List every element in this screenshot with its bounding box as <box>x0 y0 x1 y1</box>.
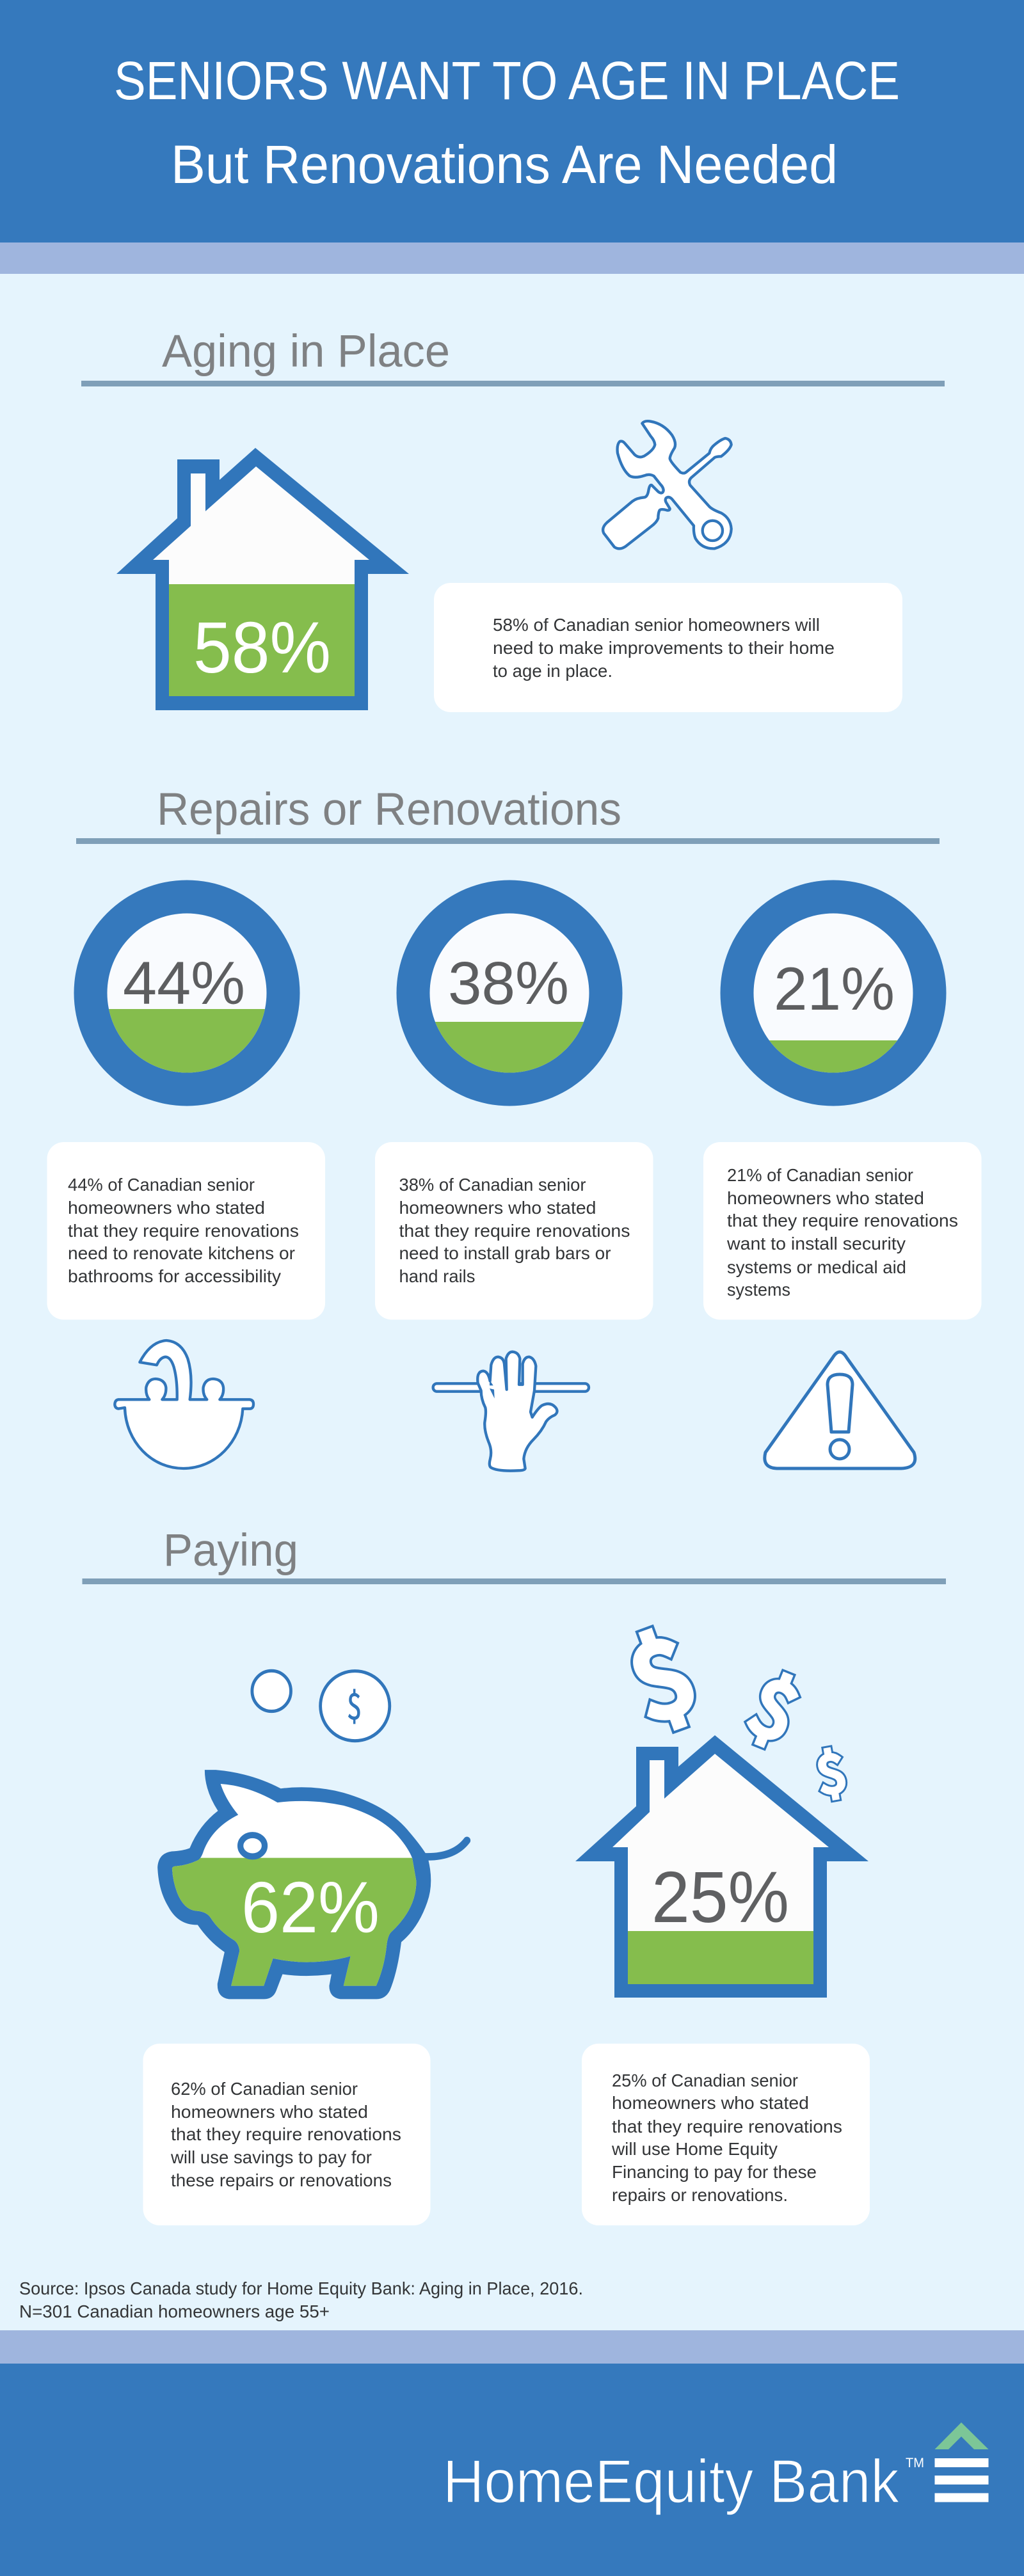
icon: coins: $ <box>347 1678 362 1730</box>
callout: 62% text: these repairs or renovations <box>171 2170 392 2190</box>
section heading: Paying: Paying <box>163 1525 298 1576</box>
subtitle: But Renovations Are Needed <box>171 134 838 195</box>
callout: 62% text: will use savings to pay for <box>170 2147 372 2167</box>
value: 25%: 25% <box>652 1857 789 1937</box>
value: 38%: 38% <box>448 950 569 1017</box>
icon: sink <box>115 1340 253 1468</box>
callout: 44% text: 44% of Canadian senior <box>68 1175 255 1195</box>
header banner <box>0 0 1024 274</box>
section heading: Aging in Place <box>81 326 945 386</box>
icon: dollar signs: $ <box>810 1731 851 1809</box>
icon: dollar signs: $ <box>736 1646 815 1763</box>
callout: 21% text: 21% of Canadian senior <box>727 1165 913 1185</box>
icon: coins <box>252 1671 390 1741</box>
callout: 62% text: 62% of Canadian senior <box>171 2079 358 2099</box>
callout: 25% text: repairs or renovations. <box>612 2185 788 2205</box>
icon: logo mark <box>934 2422 988 2502</box>
callout: 21% text: systems <box>727 1280 790 1300</box>
chart: circle 44% <box>74 880 300 1106</box>
logo: HomeEquity Bank: TM <box>906 2456 924 2470</box>
value: 62%: 62% <box>241 1867 380 1948</box>
icon: dollar signs: $ <box>609 1594 711 1751</box>
callout: 25% text: that they require renovations <box>612 2117 842 2136</box>
callout: 58% text: to age in place. <box>493 661 612 681</box>
callout: 21% text <box>703 1142 982 1319</box>
callout: 62% text: homeowners who stated <box>171 2102 368 2122</box>
chart: circle 21% <box>721 880 946 1106</box>
callout: 38% text: that they require renovations <box>399 1221 630 1241</box>
section heading: Repairs or Renovations: Repairs or Renovations <box>157 784 621 835</box>
callout: 62% text <box>143 2044 430 2225</box>
callout: 38% text: need to install grab bars or <box>399 1243 611 1263</box>
callout: 38% text: hand rails <box>399 1266 475 1286</box>
callout: 62% text: that they require renovations <box>171 2124 401 2144</box>
section heading: Repairs or Renovations <box>76 784 940 844</box>
callout: 25% text: Financing to pay for these <box>612 2162 817 2182</box>
section heading: Aging in Place: Aging in Place <box>162 326 450 377</box>
icon: dollar signs: $ <box>609 1594 711 1751</box>
title: SENIORS WANT TO AGE IN PLACE <box>114 51 900 111</box>
logo: HomeEquity Bank <box>443 2422 988 2516</box>
chart: house 25% <box>575 1735 868 1998</box>
callout: 21% text: that they require renovations <box>727 1211 958 1230</box>
source note: Source: Ipsos Canada study for Home Equity Bank: Aging in Place, 2016. <box>19 2278 583 2298</box>
callout: 58% text: 58% of Canadian senior homeowners will <box>493 615 820 635</box>
icon: dollar signs: $ <box>810 1731 851 1809</box>
icon: dollar signs <box>609 1594 851 1809</box>
footer banner <box>0 2330 1024 2576</box>
callout: 44% text: that they require renovations <box>68 1221 299 1241</box>
callout: 38% text: homeowners who stated <box>399 1198 596 1218</box>
callout: 44% text: bathrooms for accessibility <box>68 1266 281 1286</box>
callout: 44% text: homeowners who stated <box>68 1198 265 1218</box>
callout: 38% text <box>375 1142 653 1319</box>
icon: dollar signs: $ <box>736 1646 815 1763</box>
callout: 25% text: will use Home Equity <box>611 2139 778 2159</box>
callout: 44% text: need to renovate kitchens or <box>68 1243 295 1263</box>
value: 44%: 44% <box>123 950 245 1017</box>
source note: N=301 Canadian homeowners age 55+ <box>19 2302 330 2321</box>
callout: 25% text <box>582 2044 870 2225</box>
section heading: Paying <box>82 1525 946 1584</box>
callout: 21% text: homeowners who stated <box>727 1188 924 1208</box>
callout: 25% text: 25% of Canadian senior <box>612 2071 798 2090</box>
icon: warning triangle <box>765 1352 915 1468</box>
callout: 58% text: need to make improvements to their home <box>493 638 835 658</box>
callout: 21% text: want to install security <box>726 1234 906 1253</box>
value: 58%: 58% <box>193 607 331 688</box>
icon: wrench and screwdriver <box>603 421 732 548</box>
source note <box>19 2278 583 2321</box>
icon: hand on grab bar <box>433 1352 589 1471</box>
callout: 21% text: systems or medical aid <box>727 1257 906 1277</box>
callout: 38% text: 38% of Canadian senior <box>399 1175 586 1195</box>
chart: house 58% <box>116 448 409 710</box>
value: 21%: 21% <box>774 955 895 1023</box>
chart: piggy bank 62% <box>157 1770 467 1999</box>
logo: HomeEquity Bank: HomeEquity Bank <box>443 2447 900 2516</box>
chart: circle 38% <box>397 880 622 1106</box>
callout: 44% text <box>47 1142 325 1319</box>
callout: 58% text <box>434 583 902 712</box>
callout: 25% text: homeowners who stated <box>612 2093 809 2113</box>
